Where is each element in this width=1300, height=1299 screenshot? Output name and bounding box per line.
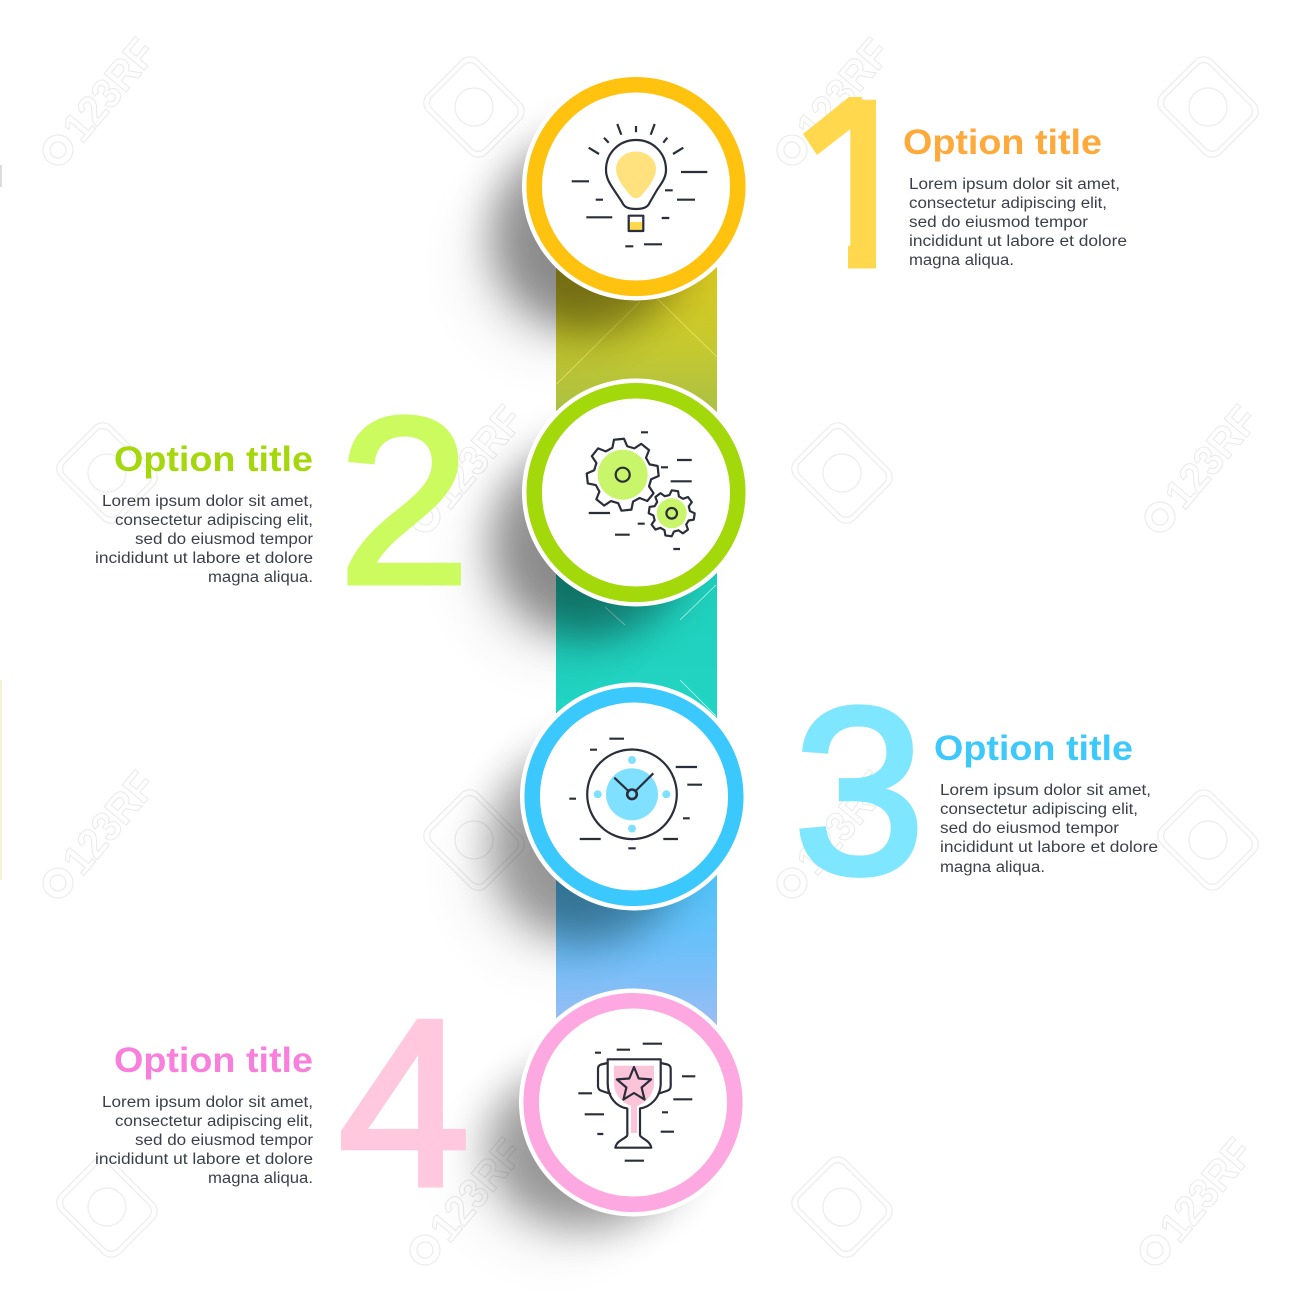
body 2: magna aliqua. xyxy=(208,569,313,586)
text block: option 3 xyxy=(934,729,1158,876)
vertical ribbon connector xyxy=(556,260,717,1030)
step 1 circle xyxy=(522,72,750,300)
body 1: incididunt ut labore et dolore xyxy=(909,233,1127,250)
watermark layer: 123RF xyxy=(1150,1130,1262,1250)
title 3: Option title xyxy=(934,729,1133,768)
title 2: Option title xyxy=(114,440,313,479)
title 1: Option title xyxy=(903,123,1102,162)
body 1: sed do eiusmod tempor xyxy=(909,214,1088,231)
number 4: 4 xyxy=(338,971,470,1236)
watermark layer: 123RF xyxy=(1155,397,1267,517)
watermark layer: 123RF xyxy=(420,1130,532,1250)
watermark layer: 123RF xyxy=(53,30,165,150)
body 4: Lorem ipsum dolor sit amet, xyxy=(102,1094,313,1111)
icon: light bulb xyxy=(572,124,707,246)
number 2: 2 xyxy=(338,369,470,634)
body 3 xyxy=(940,782,1158,876)
body 1: magna aliqua. xyxy=(909,252,1014,269)
body 3: sed do eiusmod tempor xyxy=(940,820,1119,837)
watermark layer: 123RF xyxy=(420,397,532,517)
title 4: Option title xyxy=(114,1041,313,1080)
body 4: magna aliqua. xyxy=(208,1170,313,1187)
body 1: consectetur adipiscing elit, xyxy=(909,195,1107,212)
body 4: incididunt ut labore et dolore xyxy=(95,1151,313,1168)
body 3: incididunt ut labore et dolore xyxy=(940,839,1158,856)
body 3: magna aliqua. xyxy=(940,859,1045,876)
body 1 xyxy=(909,176,1127,269)
body 3: consectetur adipiscing elit, xyxy=(940,801,1138,818)
body 3: Lorem ipsum dolor sit amet, xyxy=(940,782,1151,799)
step 2 circle xyxy=(522,378,750,606)
number 1: 1 xyxy=(793,52,925,317)
body 1: Lorem ipsum dolor sit amet, xyxy=(909,176,1120,193)
body 2: incididunt ut labore et dolore xyxy=(95,550,313,567)
watermark layer: 123RF xyxy=(787,763,899,883)
body 2: Lorem ipsum dolor sit amet, xyxy=(102,493,313,510)
icon: clock xyxy=(569,739,702,848)
icon: trophy xyxy=(578,1044,695,1161)
text block: option 2 xyxy=(95,440,313,586)
step 4 circle xyxy=(519,988,747,1216)
body 2 xyxy=(95,493,313,586)
text block: option 1 xyxy=(903,123,1127,269)
number 1 xyxy=(803,97,876,268)
text block: option 4 xyxy=(95,1041,313,1187)
body 4: consectetur adipiscing elit, xyxy=(115,1113,313,1130)
circle shadows xyxy=(477,132,692,1238)
body 2: consectetur adipiscing elit, xyxy=(115,512,313,529)
watermark layer: 123RF xyxy=(787,30,899,150)
body 2: sed do eiusmod tempor xyxy=(135,531,313,548)
number 3: 3 xyxy=(793,659,925,924)
icon: gears xyxy=(584,432,697,549)
step 3 circle xyxy=(520,682,748,910)
watermark layer: 123RF xyxy=(53,763,165,883)
body 4 xyxy=(95,1094,313,1187)
body 4: sed do eiusmod tempor xyxy=(135,1132,313,1149)
